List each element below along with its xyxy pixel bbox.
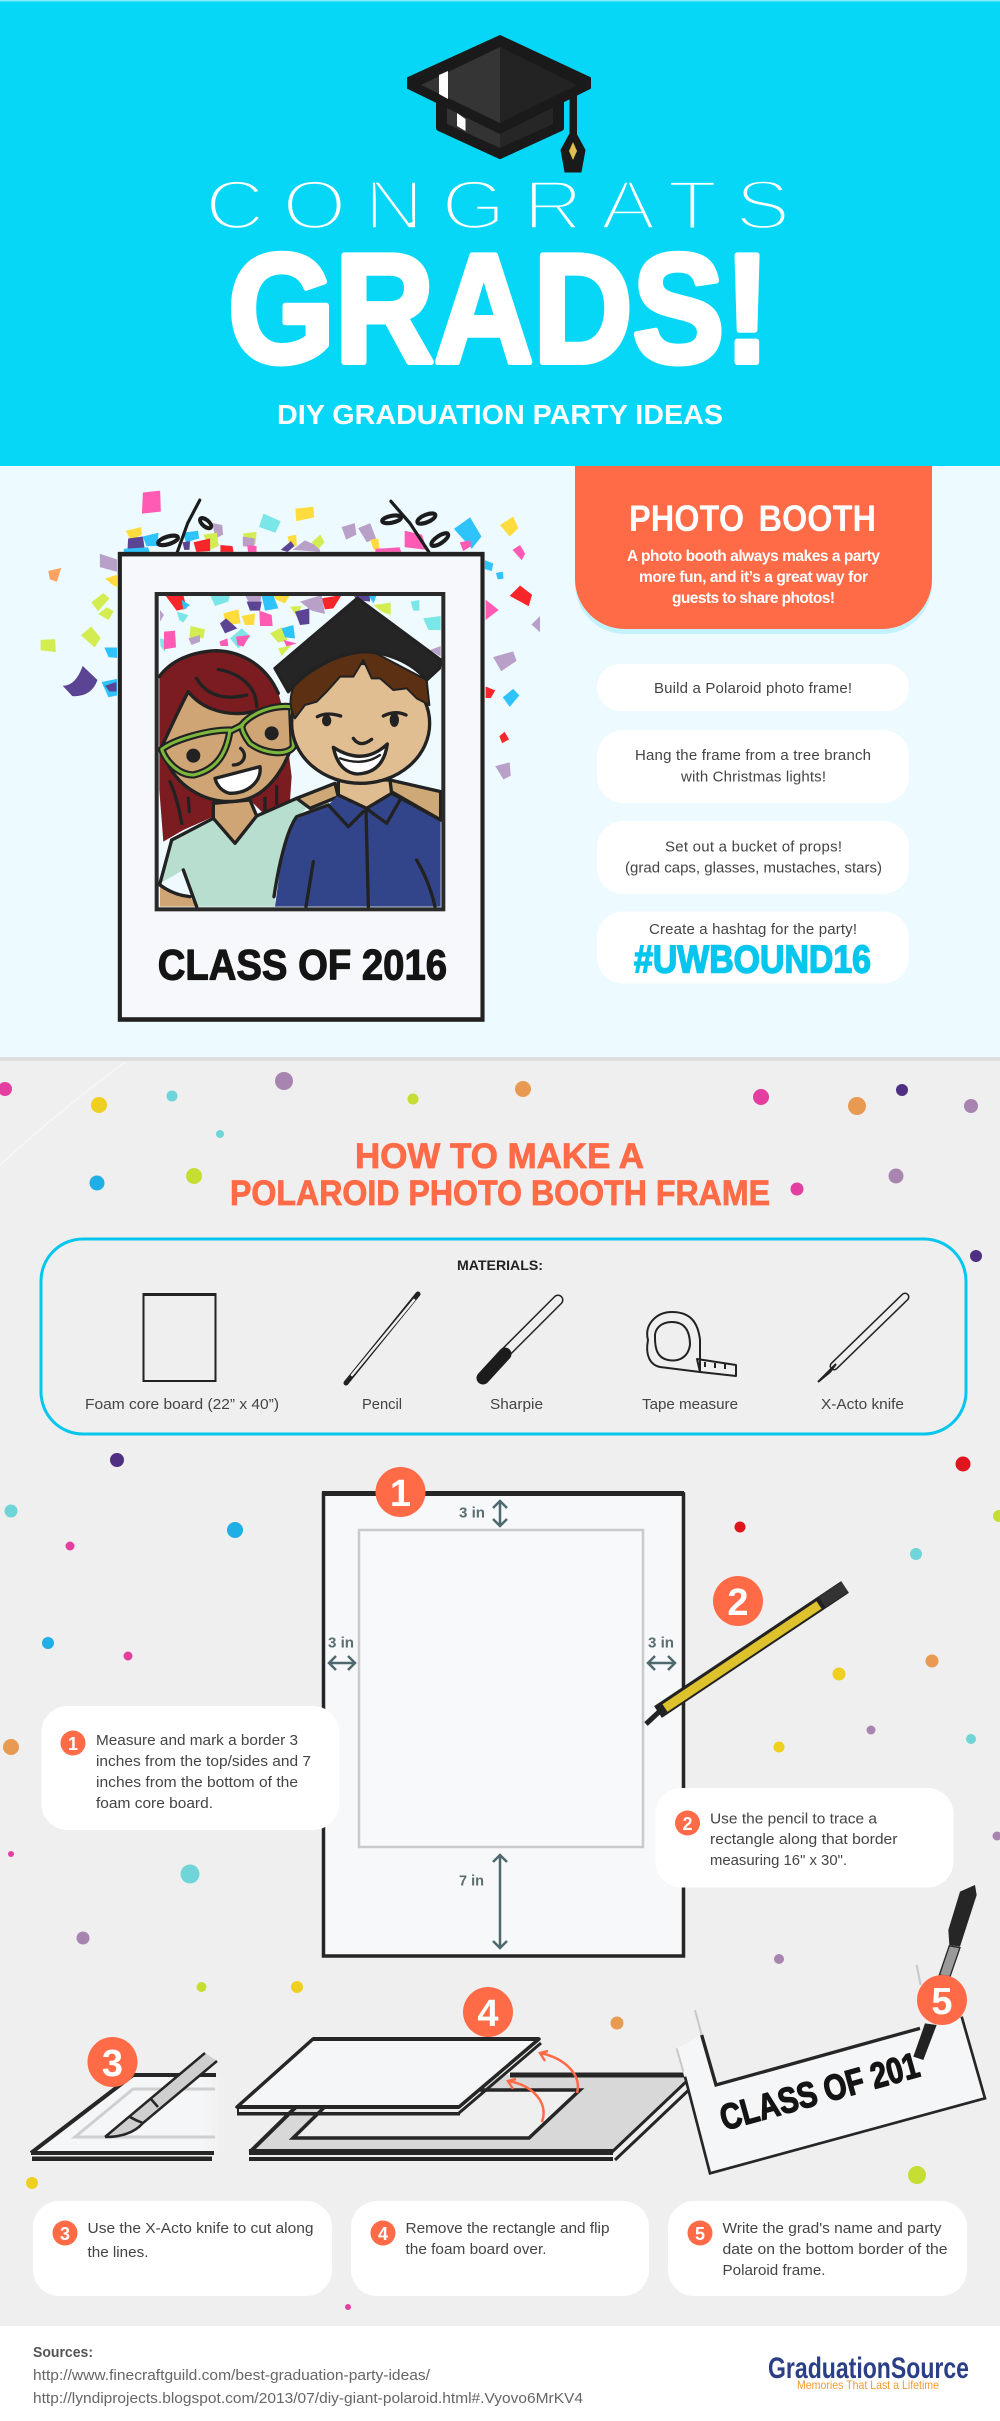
description: guests to share photos! (672, 590, 835, 607)
heading: POLAROID PHOTO BOOTH FRAME (230, 1174, 770, 1213)
badge 2: 2 (727, 1582, 749, 1624)
card: step 5: 5 (695, 2224, 705, 2244)
label: right 3 in: 3 in (648, 1634, 674, 1652)
panel: materials (41, 1239, 966, 1434)
illustration: step 5 writing (677, 1885, 985, 2173)
card: step 4 (351, 2201, 649, 2296)
girl (159, 651, 338, 907)
badge 4: 4 (477, 1993, 499, 2035)
icon: sharpie (483, 1300, 558, 1378)
x-acto knife (105, 2053, 217, 2137)
badge 2 (713, 1576, 763, 1626)
tip: props (597, 821, 909, 894)
title: grads: GRADS! (228, 222, 770, 395)
illustration: pencil (646, 1587, 845, 1724)
description: more fun, and it’s a great way for (639, 569, 868, 586)
tip: hang frame (597, 730, 909, 803)
icon: x-acto knife (818, 1297, 905, 1382)
illustration: polaroid frame with grads and confetti (41, 491, 540, 1020)
card: step 4: Remove the rectangle and flip (406, 2221, 610, 2237)
tip: build frame: Build a Polaroid photo frame! (654, 680, 852, 697)
callout: step 1 (42, 1706, 339, 1830)
icon: pencil (346, 1294, 418, 1383)
card: step 5: Write the grad's name and party (722, 2221, 942, 2237)
sources: Sources: (33, 2345, 93, 2361)
step 2 marker: 2 (682, 1814, 693, 1834)
card: step 3 (33, 2201, 332, 2296)
label: top 3 in: 3 in (459, 1504, 485, 1522)
card: step 3: Use the X-Acto knife to cut along (88, 2221, 314, 2237)
callout: step 2 (656, 1788, 954, 1888)
arrow: left 3 in (329, 1656, 355, 1670)
callout: step 1: Measure and mark a border 3 (96, 1733, 298, 1749)
removed rectangle (237, 2037, 541, 2116)
tip: props: Set out a bucket of props! (665, 838, 842, 856)
step 1 marker (60, 1730, 86, 1756)
card: step 4: the foam board over. (406, 2242, 546, 2258)
panel: materials: MATERIALS: (457, 1257, 543, 1273)
handwritten caption: CLASS OF 2016 (158, 940, 447, 989)
sources: http://www.finecraftguild.com/best-graduation-party-ideas/ (33, 2368, 431, 2384)
header banner (0, 0, 1000, 466)
sources (33, 2345, 583, 2407)
callout: step 2: rectangle along that border (710, 1832, 898, 1848)
label: left 3 in: 3 in (328, 1634, 354, 1652)
icon: foam board (144, 1293, 216, 1381)
polaroid frame (120, 554, 483, 1020)
material labels: Pencil (362, 1397, 402, 1413)
arrow: flip outer (540, 2051, 578, 2093)
heading: PHOTO BOOTH (629, 498, 876, 539)
diagram: foam board with measurements (322, 1467, 684, 1956)
tip: hashtag: #UWBOUND16 (634, 938, 871, 982)
card: step 5: date on the bottom border of the (722, 2242, 948, 2258)
callout: step 1: inches from the bottom of the (96, 1775, 298, 1791)
confetti behind the frame (41, 491, 540, 780)
confetti in the photo (160, 595, 441, 657)
handwritten caption: CLASS OF 201 (715, 2044, 924, 2138)
badge 3: 3 (102, 2043, 123, 2085)
footer (0, 2326, 1000, 2421)
card: photo booth intro (575, 466, 932, 634)
material labels: X-Acto knife (821, 1397, 904, 1413)
illustration: step 4 flipping (237, 1987, 694, 2161)
callout: step 2: measuring 16" x 30". (710, 1853, 847, 1869)
confetti dots (0, 1072, 1000, 2310)
icon: tape measure (647, 1312, 736, 1376)
boy (274, 598, 441, 907)
subtitle: DIY GRADUATION PARTY IDEAS (277, 399, 723, 430)
panel: how to make (0, 1057, 1000, 2326)
badge 5: 5 (931, 1981, 953, 2023)
callout: step 1: inches from the top/sides and 7 (96, 1754, 311, 1770)
step 2 marker (675, 1810, 700, 1836)
polaroid frame and surrounding confetti (41, 491, 540, 1020)
tip: hashtag (597, 912, 909, 984)
panel: photo booth (0, 466, 1000, 1058)
badge 3 (88, 2037, 138, 2087)
tip: props: (grad caps, glasses, mustaches, stars) (625, 860, 882, 876)
heading (230, 1137, 770, 1213)
card: step 5: Polaroid frame. (722, 2263, 826, 2279)
material labels: Tape measure (642, 1397, 738, 1413)
badge 5 (917, 1975, 967, 2025)
arrow: right 3 in (648, 1656, 675, 1670)
description (627, 548, 880, 607)
material labels: Sharpie (490, 1397, 543, 1413)
step 1 marker: 1 (68, 1734, 78, 1754)
tip: hang frame: with Christmas lights! (680, 768, 826, 786)
title: congrats: CONGRATS (205, 167, 790, 245)
material labels: Foam core board (22” x 40”) (85, 1397, 279, 1413)
tip: hashtag: Create a hashtag for the party! (649, 921, 857, 938)
description: A photo booth always makes a party (627, 548, 880, 565)
arrow: bottom 7 in (493, 1855, 507, 1948)
illustration: step 3 cutting (31, 2037, 225, 2161)
icon: graduation cap (408, 36, 590, 172)
sources: http://lyndiprojects.blogspot.com/2013/07/diy-giant-polaroid.html#.Vyovo6MrKV4 (33, 2391, 583, 2407)
sharpie (913, 1885, 977, 2060)
callout: step 1: foam core board. (96, 1796, 213, 1812)
heading: HOW TO MAKE A (355, 1137, 644, 1176)
callout: step 2: Use the pencil to trace a (710, 1812, 878, 1828)
tip: hang frame: Hang the frame from a tree branch (635, 747, 871, 764)
branches (157, 500, 450, 552)
badge 1 (376, 1467, 426, 1517)
material labels (85, 1397, 904, 1413)
arrow: top 3 in (493, 1501, 507, 1526)
logo: Memories That Last a Lifetime (797, 2378, 939, 2392)
card: step 3: the lines. (88, 2245, 148, 2261)
badge 1: 1 (390, 1473, 411, 1515)
card: step 3: 3 (60, 2224, 70, 2244)
tip: build frame (597, 664, 909, 711)
label: 7 in: 7 in (459, 1872, 484, 1890)
card: step 4: 4 (378, 2224, 388, 2244)
arrow: flip inner (508, 2079, 544, 2122)
card: step 5 (668, 2201, 967, 2296)
badge 4 (463, 1987, 513, 2037)
photo area (157, 594, 443, 909)
